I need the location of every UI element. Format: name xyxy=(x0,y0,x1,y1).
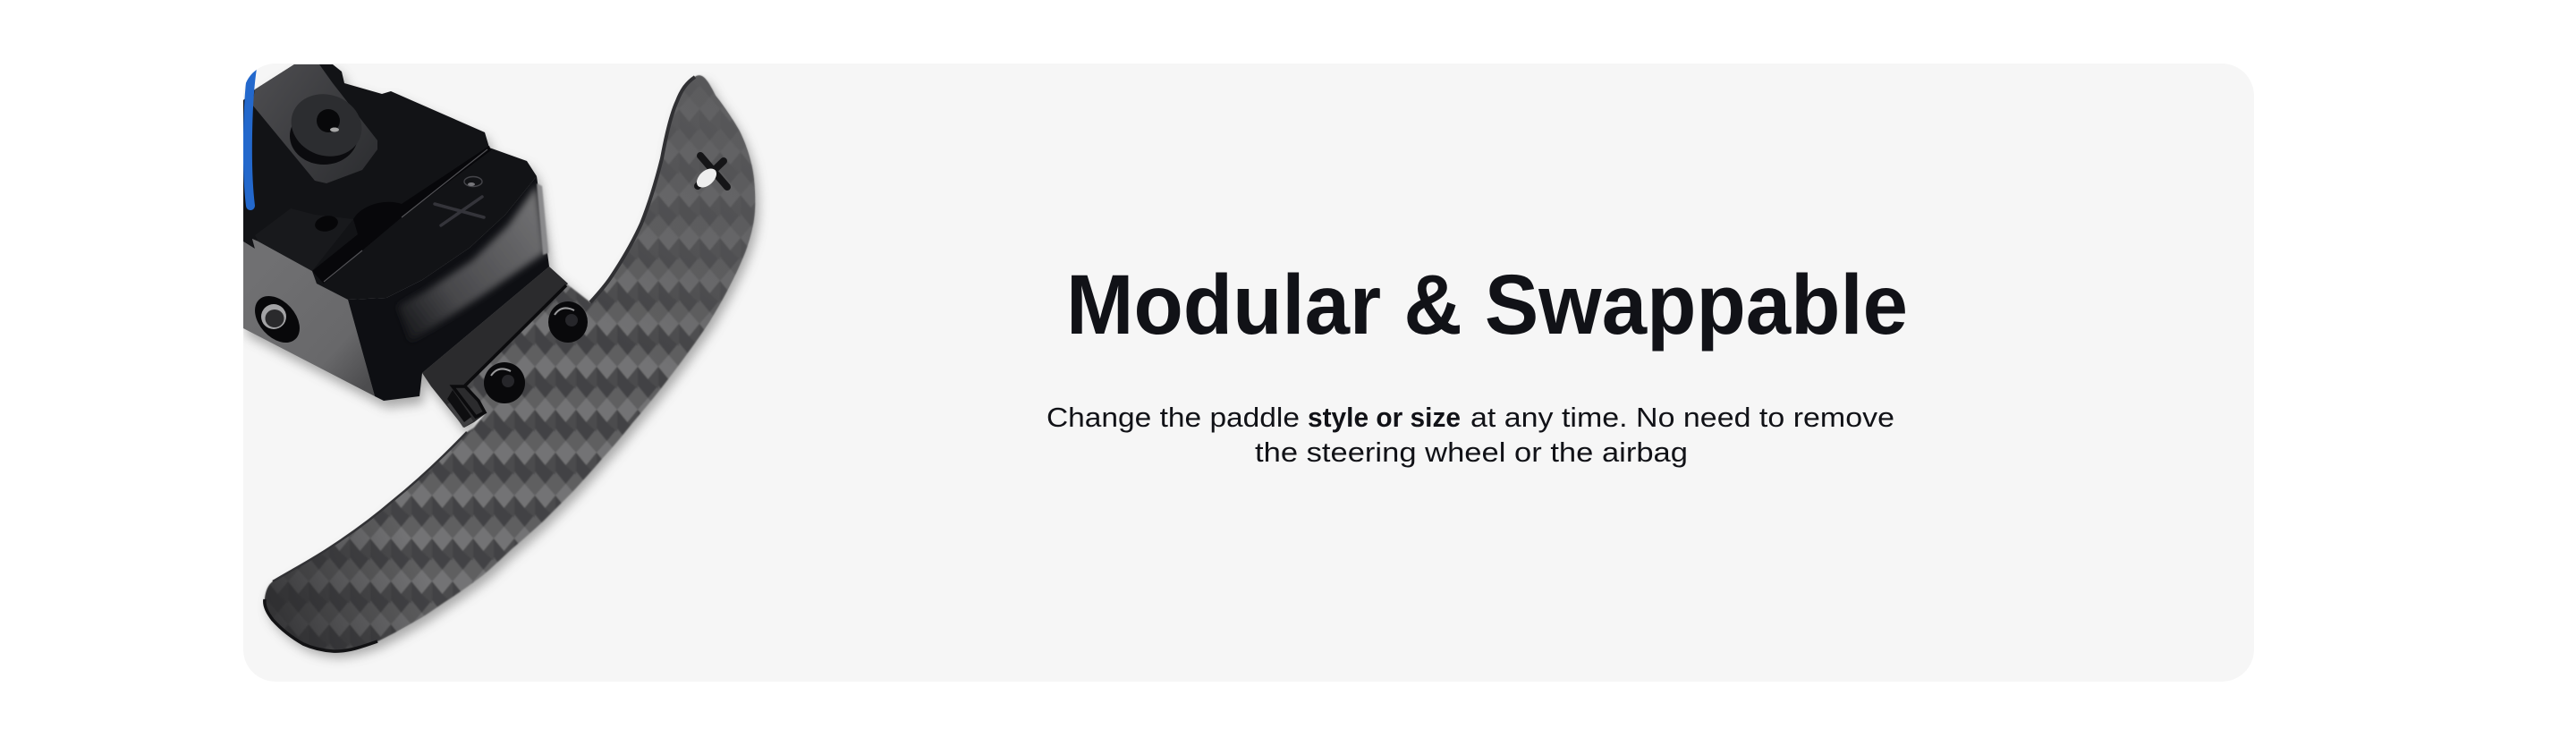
panel: card background xyxy=(243,64,2254,682)
paddle drop shadow xyxy=(247,72,758,657)
body text xyxy=(1046,402,1894,468)
side bolt xyxy=(255,296,300,343)
top plate detail xyxy=(255,146,491,284)
cross cutout in paddle xyxy=(693,156,727,191)
body text: at any time. No need to remove xyxy=(1470,402,1894,433)
engraved cross logo xyxy=(435,197,484,225)
body text: the steering wheel or the airbag xyxy=(1255,437,1688,468)
clamp plate and bolt xyxy=(252,64,377,183)
mounting bracket xyxy=(422,267,568,428)
module side face xyxy=(243,239,375,396)
paddle screws xyxy=(484,301,588,403)
heading: Modular & Swappable xyxy=(1066,258,1908,352)
body text: Change the paddle xyxy=(1046,402,1300,433)
module front face xyxy=(348,176,549,401)
module top face xyxy=(243,64,537,300)
carbon fibre paddle blade xyxy=(265,75,755,651)
image: paddle shifter module xyxy=(243,63,758,657)
body text: style or size xyxy=(1308,402,1461,433)
blue cable xyxy=(248,63,253,206)
